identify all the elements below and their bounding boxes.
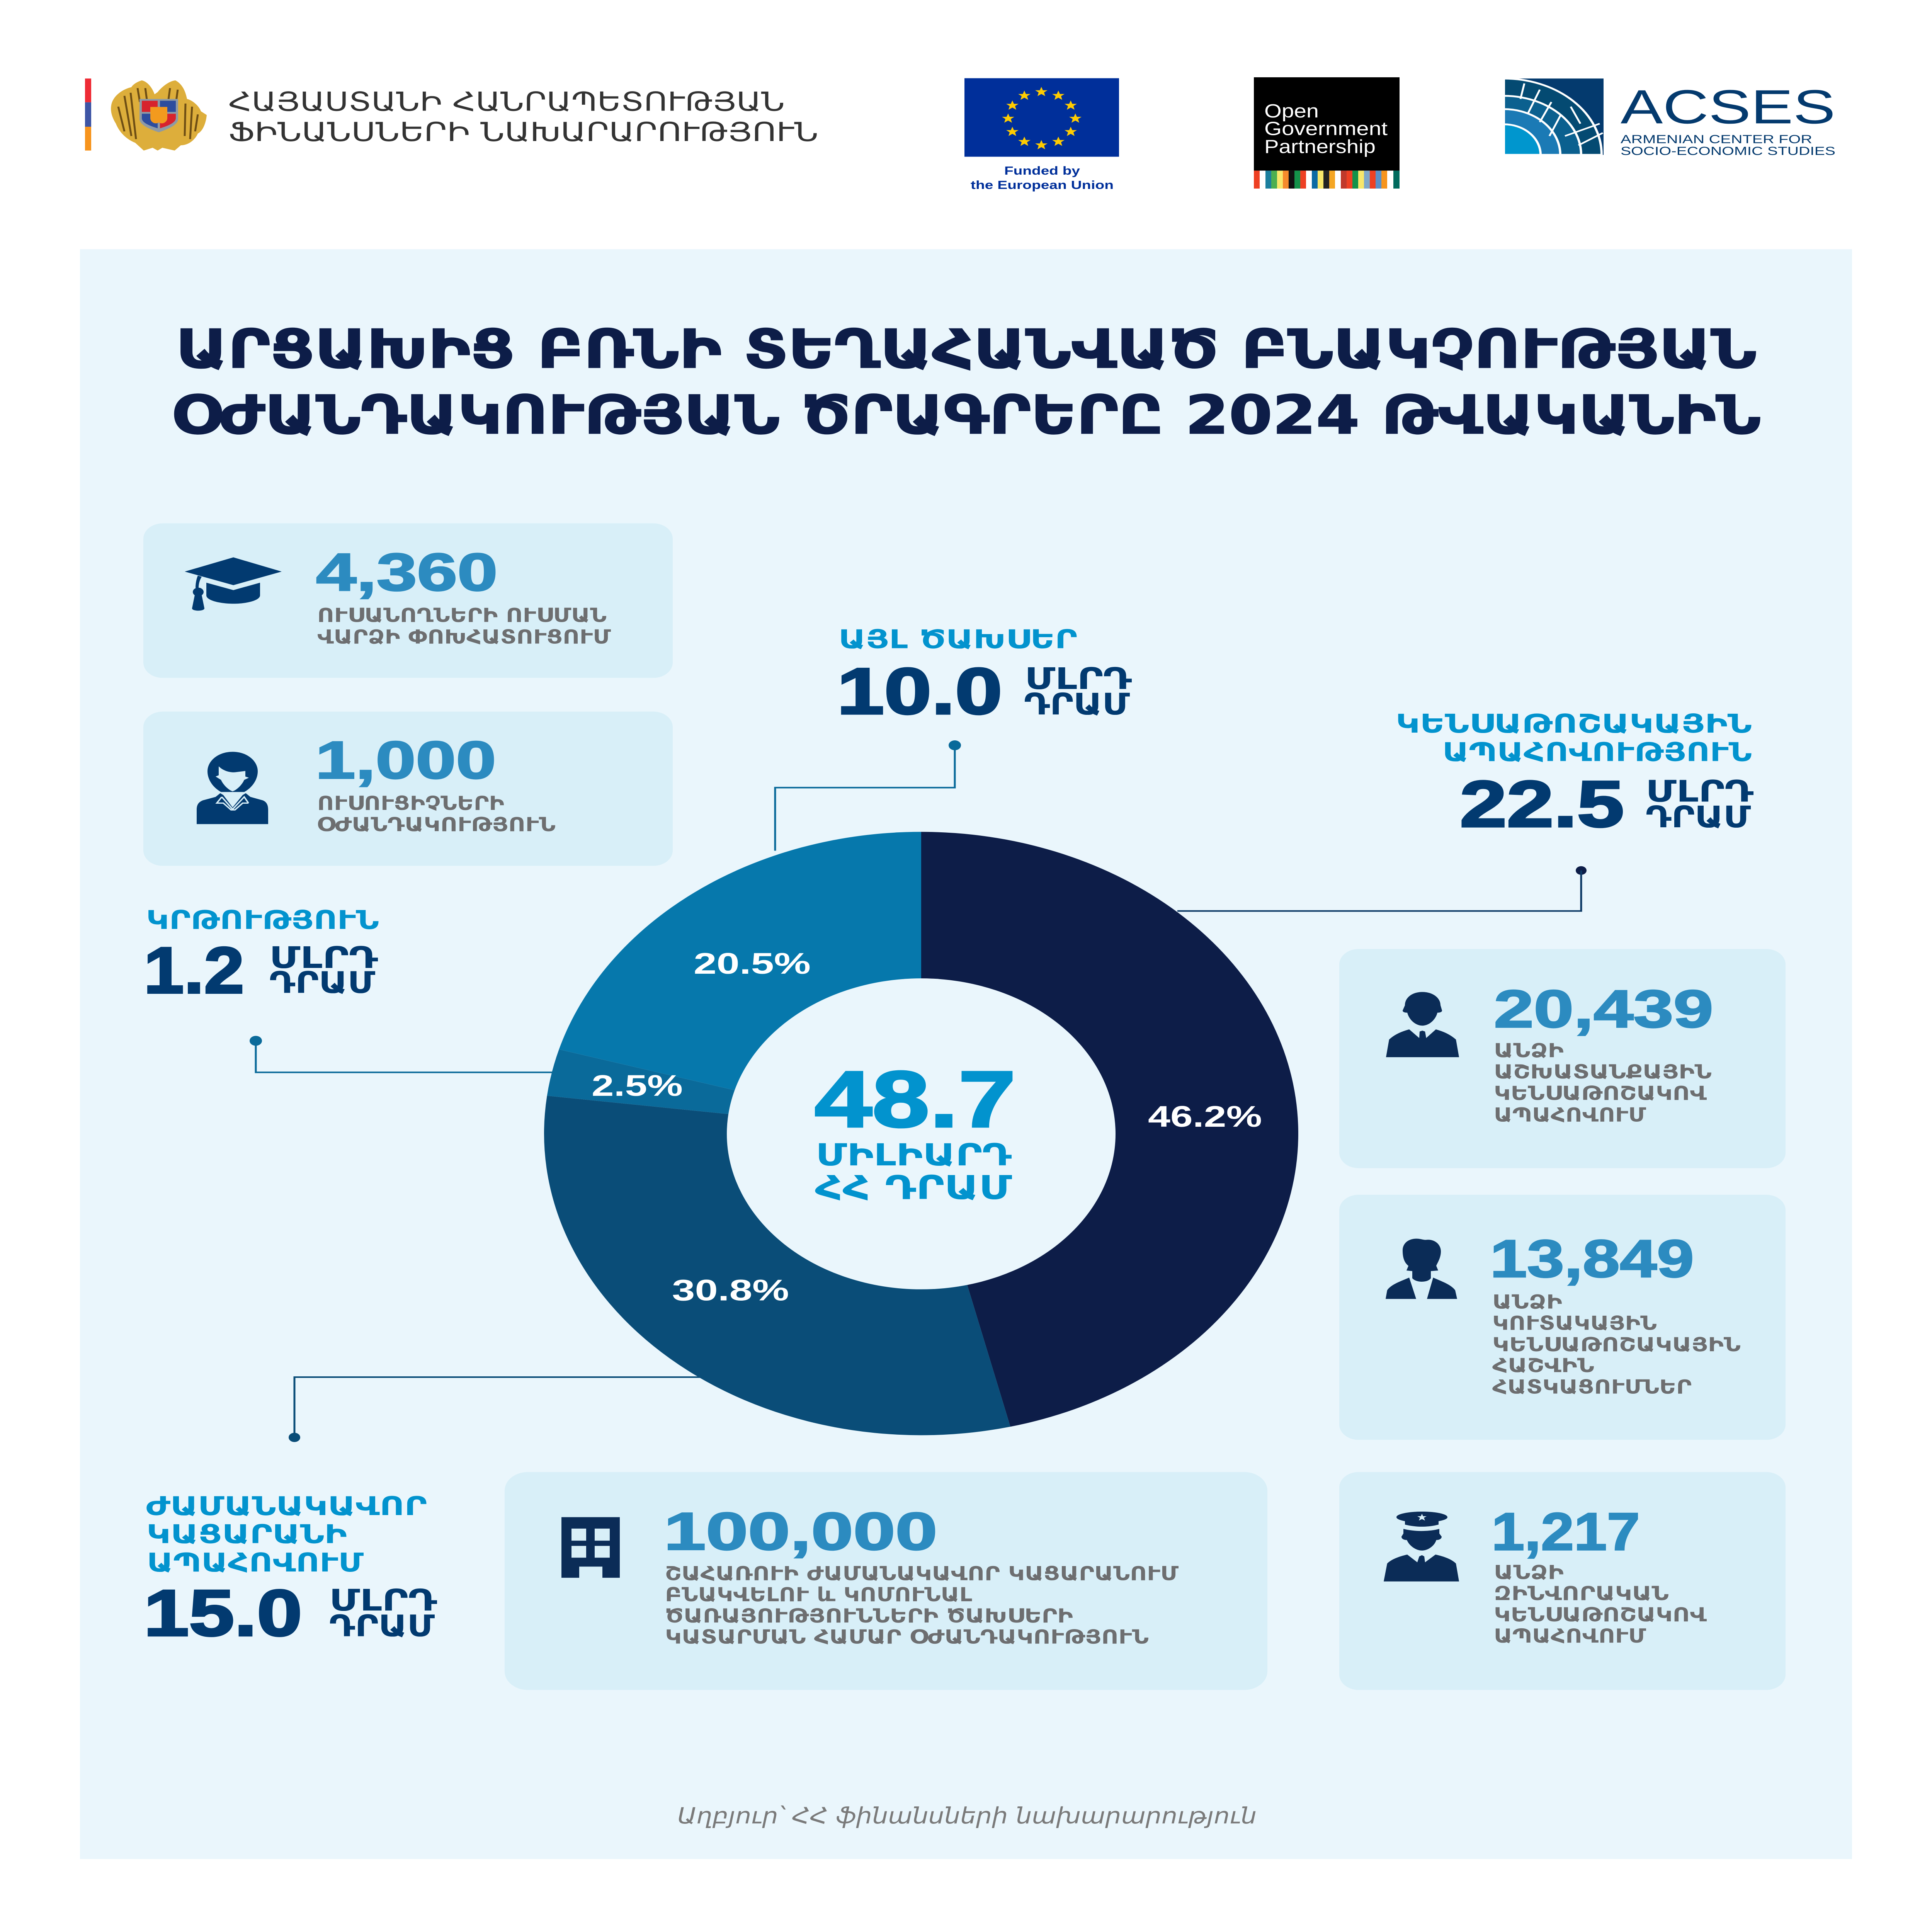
unit: ԴՐԱՄ (329, 1609, 435, 1643)
value: 22.5: 22.5 (1460, 767, 1624, 840)
center unit (815, 1138, 1012, 1207)
segment: social security 46.2% (921, 832, 1298, 1427)
stat: 1,000: 1,000 (315, 731, 496, 790)
label: military pension: ԱՊԱՀՈՎՈՒՄ (1494, 1625, 1646, 1648)
segment: education 2.5% (547, 1049, 921, 1134)
OGP wordmark (1264, 100, 1388, 157)
ACSES wordmark: ARMENIAN CENTER FOR (1621, 133, 1812, 146)
value: 1.2: 1.2 (144, 934, 244, 1007)
heading: ԿԵՆՍԱԹՈՇԱԿԱՅԻՆ (1396, 708, 1752, 739)
callout: social security (1177, 708, 1753, 911)
label: housing support: ՇԱՀԱՌՈՒԻ ԺԱՄԱՆԱԿԱՎՈՐ ԿԱՑԱՐԱՆՈՒՄ (665, 1563, 1179, 1585)
callout: education (144, 905, 555, 1072)
unit: ԴՐԱՄ (269, 965, 375, 1000)
label: labour pension: ԱՊԱՀՈՎՈՒՄ (1494, 1104, 1646, 1126)
label: accumulative pension: ՀԱՏԿԱՑՈՒՄՆԵՐ (1492, 1376, 1692, 1398)
heading: ԱՊԱՀՈՎՈՒԹՅՈՒՆ (1442, 737, 1752, 767)
callout: temporary housing (144, 1377, 701, 1650)
unit: ԴՐԱՄ (1646, 799, 1751, 834)
leader line (250, 1036, 555, 1072)
unit (269, 940, 378, 1000)
label: accumulative pension: ԱՆՁԻ (1492, 1291, 1562, 1313)
label: accumulative pension: ՀԱՇՎԻՆ (1492, 1355, 1594, 1377)
label: housing support: ԾԱՌԱՅՈՒԹՅՈՒՆՆԵՐԻ ԾԱԽՍԵՐԻ (665, 1605, 1073, 1628)
panel: housing beneficiaries card (505, 1472, 1267, 1690)
stat: 1,217: 1,217 (1492, 1502, 1640, 1561)
flag bar (85, 78, 91, 151)
OGP colour stripes (1254, 171, 1400, 189)
panel: labour pension card (1339, 949, 1786, 1168)
stat: 100,000: 100,000 (664, 1502, 937, 1561)
unit: ՄԼՐԴ (269, 940, 378, 975)
label: housing support (665, 1563, 1179, 1648)
segment: other 20.5% (559, 832, 921, 1134)
logo: Open Government Partnership (1254, 77, 1400, 189)
unit (329, 1583, 437, 1643)
value: 10.0: 10.0 (837, 654, 1002, 728)
stat: 4,360: 4,360 (316, 543, 498, 602)
heading: ԿԱՑԱՐԱՆԻ (146, 1519, 347, 1549)
unit: ՄԼՐԴ (1025, 662, 1132, 696)
label: student tuition (317, 605, 611, 648)
label: military pension: ԶԻՆՎՈՐԱԿԱՆ (1494, 1583, 1669, 1605)
leader line (775, 740, 961, 851)
funded by caption (971, 164, 1114, 192)
icon: woman teacher (197, 752, 268, 824)
donut hole (727, 978, 1116, 1289)
value labels: 2.5% (592, 1069, 683, 1102)
ministry name: ՖԻՆԱՆՍՆԵՐԻ ՆԱԽԱՐԱՐՈՒԹՅՈՒՆ (228, 117, 818, 148)
value labels: 46.2% (1148, 1100, 1262, 1133)
ACSES wordmark: ACSES (1621, 80, 1835, 134)
icon: woman silhouette (1386, 1239, 1457, 1299)
OGP wordmark: Partnership (1264, 136, 1376, 157)
icon: officer (1384, 1512, 1459, 1582)
unit (1024, 662, 1132, 721)
label: student tuition: ՈՒՍԱՆՈՂՆԵՐԻ ՈՒՍՄԱՆ (317, 605, 607, 627)
heading: ԱՊԱՀՈՎՈՒՄ (147, 1547, 364, 1578)
OGP wordmark: Government (1264, 118, 1388, 139)
OGP wordmark: Open (1264, 100, 1319, 122)
icon: building (561, 1517, 620, 1578)
donut chart (544, 832, 1298, 1435)
center total: 48.7: 48.7 (815, 1055, 1016, 1144)
icon: coat of arms (111, 80, 207, 151)
ACSES wordmark (1621, 80, 1835, 158)
logo: funded by the European Union (964, 78, 1119, 192)
title: ՕԺԱՆԴԱԿՈՒԹՅԱՆ ԾՐԱԳՐԵՐԸ 2024 ԹՎԱԿԱՆԻՆ (172, 384, 1761, 446)
label: accumulative pension: ԿՈՒՏԱԿԱՅԻՆ (1492, 1313, 1657, 1335)
unit: ՄԼՐԴ (329, 1583, 437, 1618)
label: military pension: ԱՆՁԻ (1494, 1561, 1564, 1584)
panel: military pension card (1339, 1472, 1786, 1690)
ministry name (228, 87, 818, 148)
panel: students card (143, 523, 673, 678)
panel: accumulative pension card (1339, 1195, 1786, 1440)
funded by caption: the European Union (971, 179, 1114, 192)
label: labour pension (1494, 1040, 1712, 1126)
label: labour pension: ԱՆՁԻ (1494, 1040, 1564, 1062)
icon: ACSES parliament arcs (1504, 78, 1604, 155)
heading: ԺԱՄԱՆԱԿԱՎՈՐ (146, 1491, 427, 1521)
value labels (592, 947, 1262, 1307)
icon: EU stars (1002, 87, 1082, 149)
icon: man with tie (1386, 992, 1459, 1057)
heading (146, 1491, 427, 1578)
stat: 20,439: 20,439 (1494, 980, 1713, 1039)
title: ԱՐՑԱԽԻՑ ԲՌՆԻ ՏԵՂԱՀԱՆՎԱԾ ԲՆԱԿՉՈՒԹՅԱՆ (176, 318, 1757, 380)
heading (1396, 708, 1752, 767)
label: student tuition: ՎԱՐՁԻ ՓՈԽՀԱՏՈՒՑՈՒՄ (317, 626, 611, 648)
label: housing support: ԿԱՏԱՐՄԱՆ ՀԱՄԱՐ ՕԺԱՆԴԱԿՈՒԹՅՈՒՆ (665, 1626, 1149, 1648)
icon: graduation cap (185, 557, 282, 611)
value labels: 30.8% (672, 1274, 789, 1307)
unit: ԴՐԱՄ (1024, 687, 1130, 721)
label: accumulative pension (1492, 1291, 1741, 1398)
label: housing support: ԲՆԱԿՎԵԼՈՒ և ԿՈՄՈՒՆԱԼ (665, 1584, 972, 1606)
value labels: 20.5% (694, 947, 811, 980)
unit: ՄԼՐԴ (1646, 774, 1753, 809)
label: labour pension: ԱՇԽԱՏԱՆՔԱՅԻՆ (1494, 1061, 1712, 1083)
leader line (289, 1377, 701, 1442)
center unit: ՄԻԼԻԱՐԴ (816, 1138, 1012, 1173)
stat: 13,849: 13,849 (1490, 1229, 1694, 1289)
logo: ACSES (1504, 78, 1835, 158)
title (172, 318, 1761, 446)
heading: ԱՅԼ ԾԱԽՍԵՐ (838, 624, 1077, 655)
funded by caption: Funded by (1004, 164, 1080, 177)
unit (1646, 774, 1753, 834)
callout: other expenses (775, 624, 1132, 851)
leader line (1177, 866, 1587, 911)
header: ministry logo (85, 78, 818, 151)
center unit: ՀՀ ԴՐԱՄ (815, 1169, 1012, 1207)
segment: housing 30.8% (544, 1096, 1010, 1435)
panel: teachers card (143, 712, 673, 866)
source note: Աղբյուր՝ ՀՀ ֆինանսների նախարարություն (677, 1803, 1257, 1829)
label: teacher support (317, 793, 556, 836)
label: teacher support: ՕԺԱՆԴԱԿՈՒԹՅՈՒՆ (317, 814, 556, 836)
value: 15.0: 15.0 (144, 1576, 302, 1650)
main panel background (80, 249, 1852, 1859)
label: labour pension: ԿԵՆՍԱԹՈՇԱԿՈՎ (1494, 1082, 1707, 1105)
label: accumulative pension: ԿԵՆՍԱԹՈՇԱԿԱՅԻՆ (1492, 1334, 1741, 1356)
label: military pension: ԿԵՆՍԱԹՈՇԱԿՈՎ (1494, 1604, 1707, 1626)
label: military pension (1494, 1561, 1707, 1648)
heading: ԿՐԹՈՒԹՅՈՒՆ (146, 905, 379, 935)
ministry name: ՀԱՅԱՍՏԱՆԻ ՀԱՆՐԱՊԵՏՈՒԹՅԱՆ (228, 87, 785, 117)
label: teacher support: ՈՒՍՈՒՑԻՉՆԵՐԻ (317, 793, 504, 815)
ACSES wordmark: SOCIO-ECONOMIC STUDIES (1621, 145, 1835, 158)
